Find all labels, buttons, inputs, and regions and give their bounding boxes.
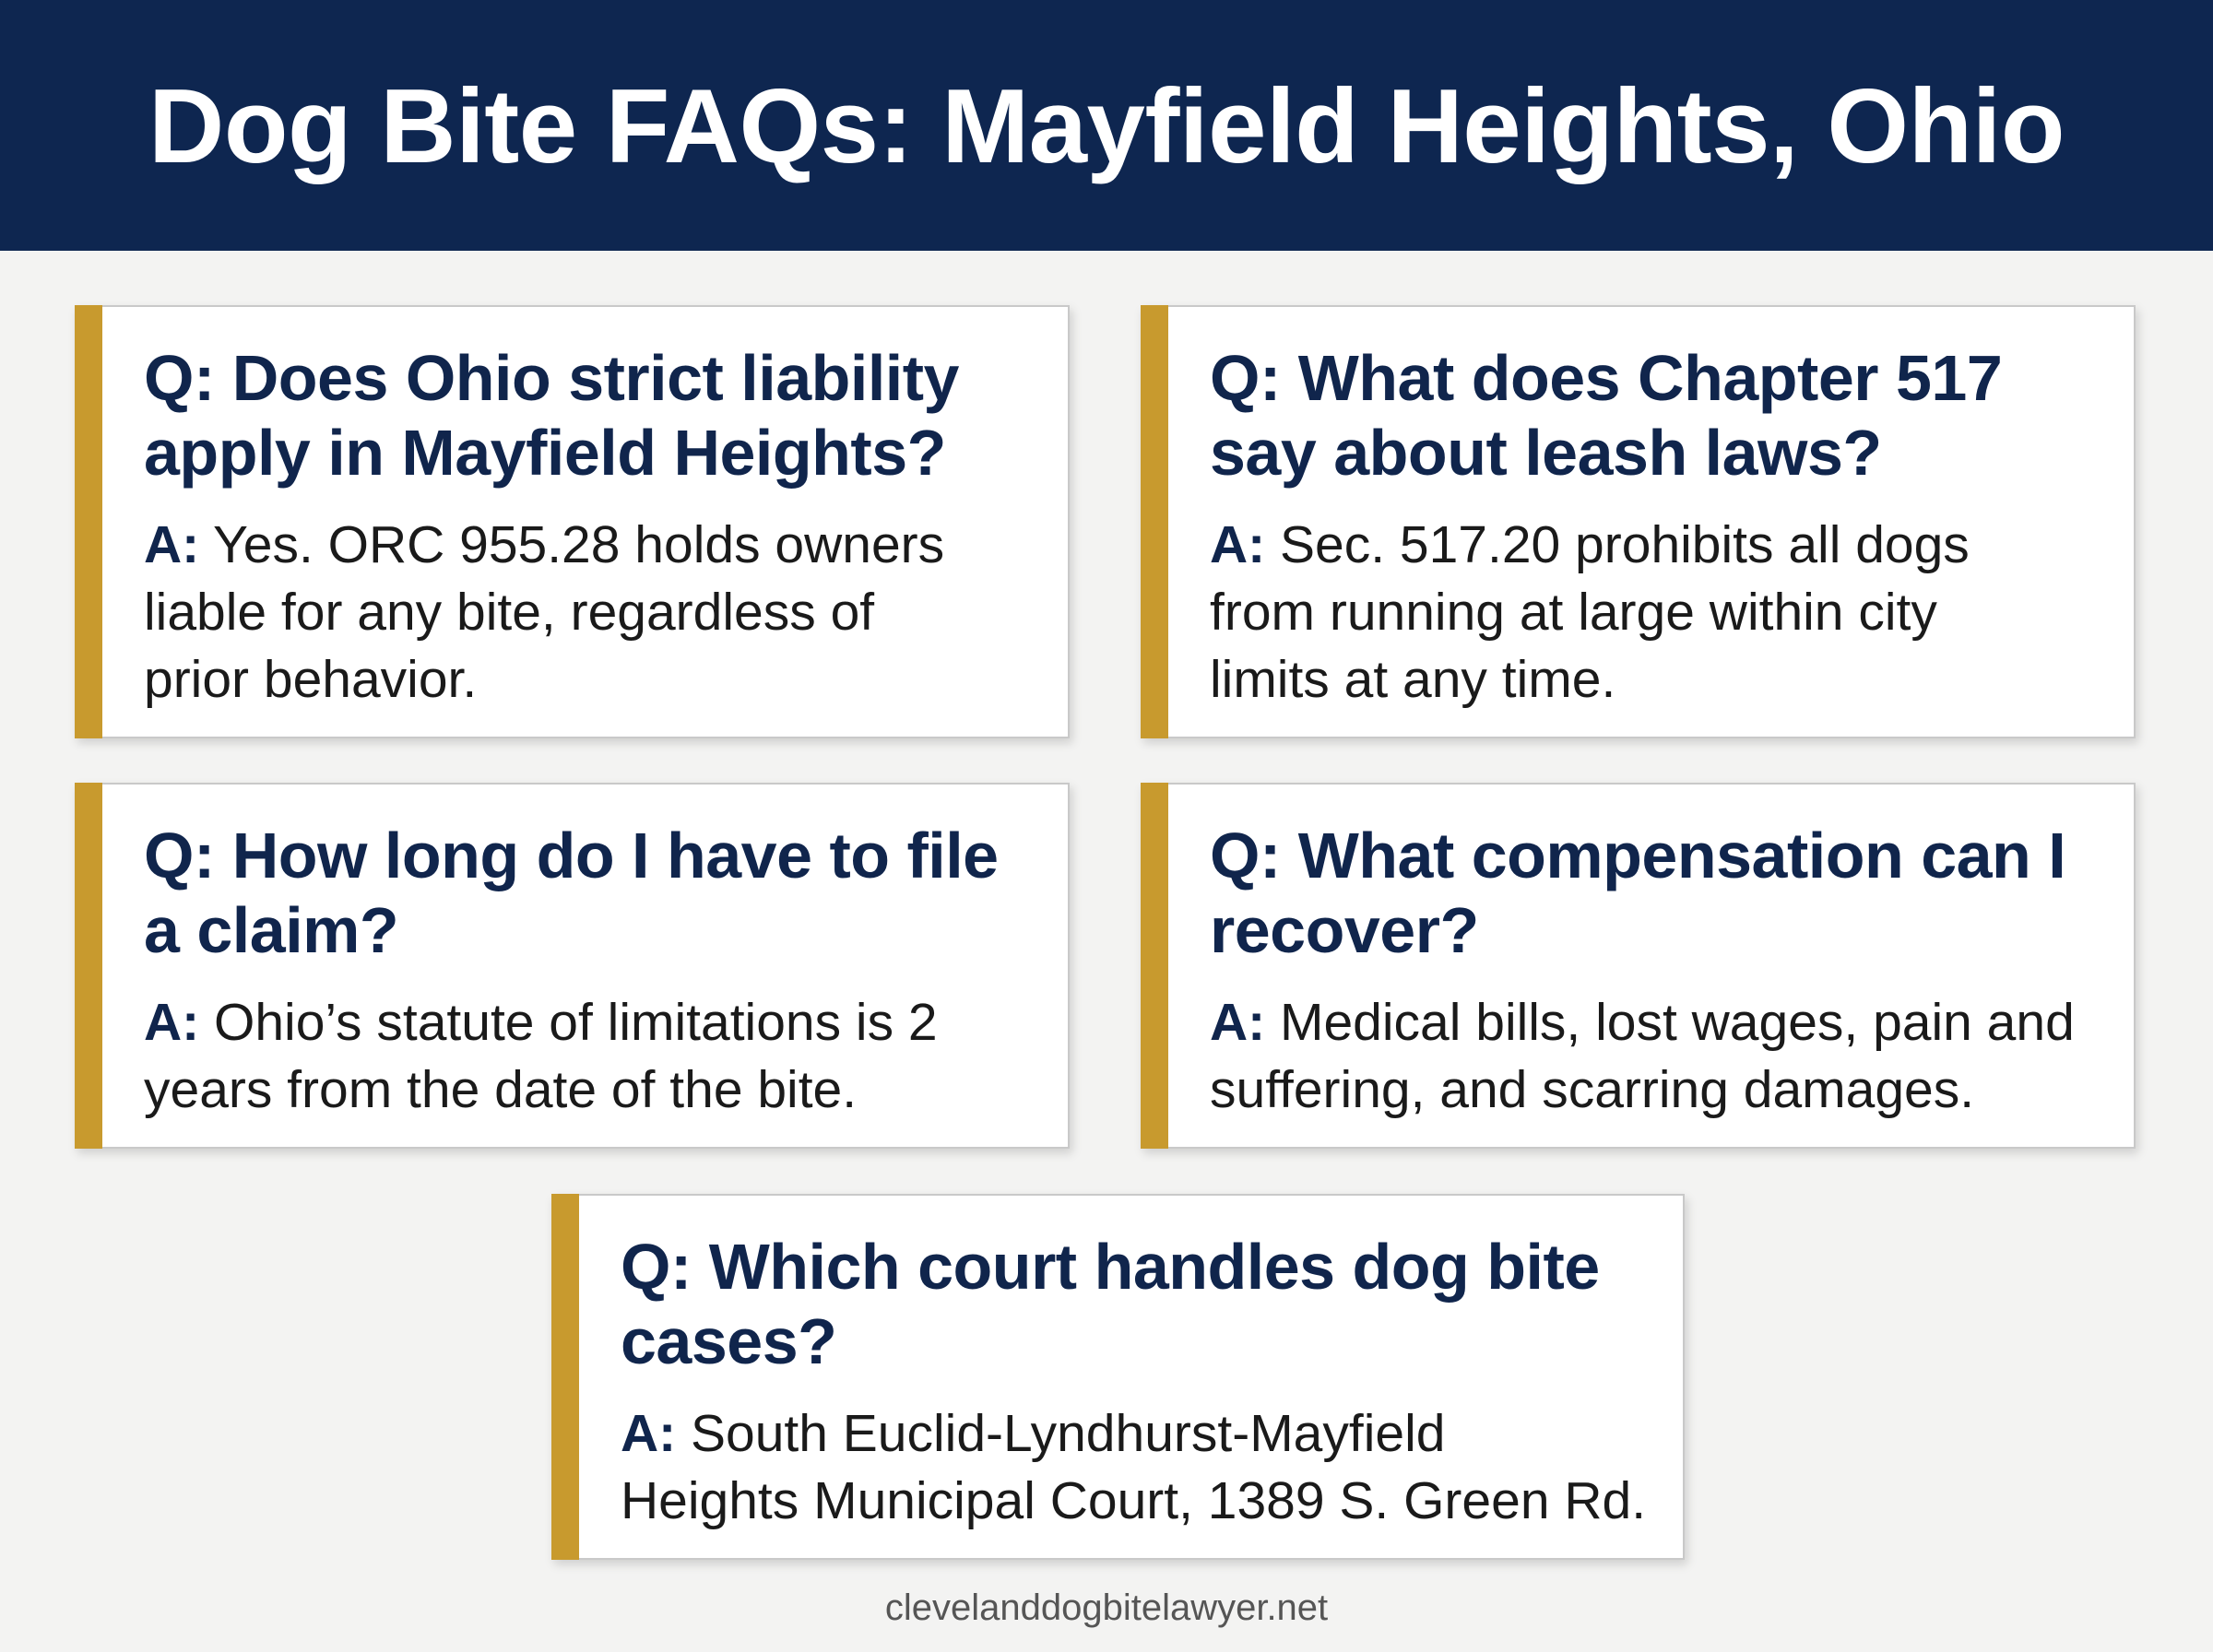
panel: strict liability xyxy=(75,305,1070,738)
question: a claim? xyxy=(144,894,398,966)
answer: A: South Euclid-Lyndhurst-Mayfield xyxy=(621,1404,1445,1463)
answer: suffering, and scarring damages. xyxy=(1210,1060,1974,1119)
answer xyxy=(1210,993,2075,1119)
title: Dog Bite FAQs: Mayfield Heights, Ohio xyxy=(148,68,2065,184)
answer: A: Medical bills, lost wages, pain and xyxy=(1210,993,2075,1052)
question: Q: How long do I have to file xyxy=(144,820,999,891)
question: apply in Mayfield Heights? xyxy=(144,417,946,489)
question xyxy=(1210,342,2002,489)
question xyxy=(144,820,999,966)
answer xyxy=(144,993,938,1119)
answer xyxy=(144,515,944,709)
question xyxy=(1210,820,2065,966)
answer: from running at large within city xyxy=(1210,583,1937,642)
footer url: clevelanddogbitelawyer.net xyxy=(885,1587,1328,1628)
question xyxy=(621,1231,1600,1377)
panel: compensation xyxy=(1141,783,2136,1149)
question: cases? xyxy=(621,1305,836,1377)
answer xyxy=(1210,515,1970,709)
question: say about leash laws? xyxy=(1210,417,1882,489)
panel: filing deadline xyxy=(75,783,1070,1149)
answer xyxy=(621,1404,1646,1530)
question: Q: What does Chapter 517 xyxy=(1210,342,2002,414)
panel: court xyxy=(551,1194,1685,1560)
answer: prior behavior. xyxy=(144,650,477,709)
panel: leash laws xyxy=(1141,305,2136,738)
header banner xyxy=(0,0,2213,251)
question: recover? xyxy=(1210,894,1479,966)
question: Q: What compensation can I xyxy=(1210,820,2065,891)
answer: liable for any bite, regardless of xyxy=(144,583,874,642)
question xyxy=(144,342,959,489)
answer: limits at any time. xyxy=(1210,650,1615,709)
answer: A: Ohio’s statute of limitations is 2 xyxy=(144,993,938,1052)
answer: years from the date of the bite. xyxy=(144,1060,857,1119)
answer: A: Yes. ORC 955.28 holds owners xyxy=(144,515,944,574)
question: Q: Does Ohio strict liability xyxy=(144,342,959,414)
question: Q: Which court handles dog bite xyxy=(621,1231,1600,1303)
answer: Heights Municipal Court, 1389 S. Green Rd. xyxy=(621,1471,1646,1530)
answer: A: Sec. 517.20 prohibits all dogs xyxy=(1210,515,1970,574)
